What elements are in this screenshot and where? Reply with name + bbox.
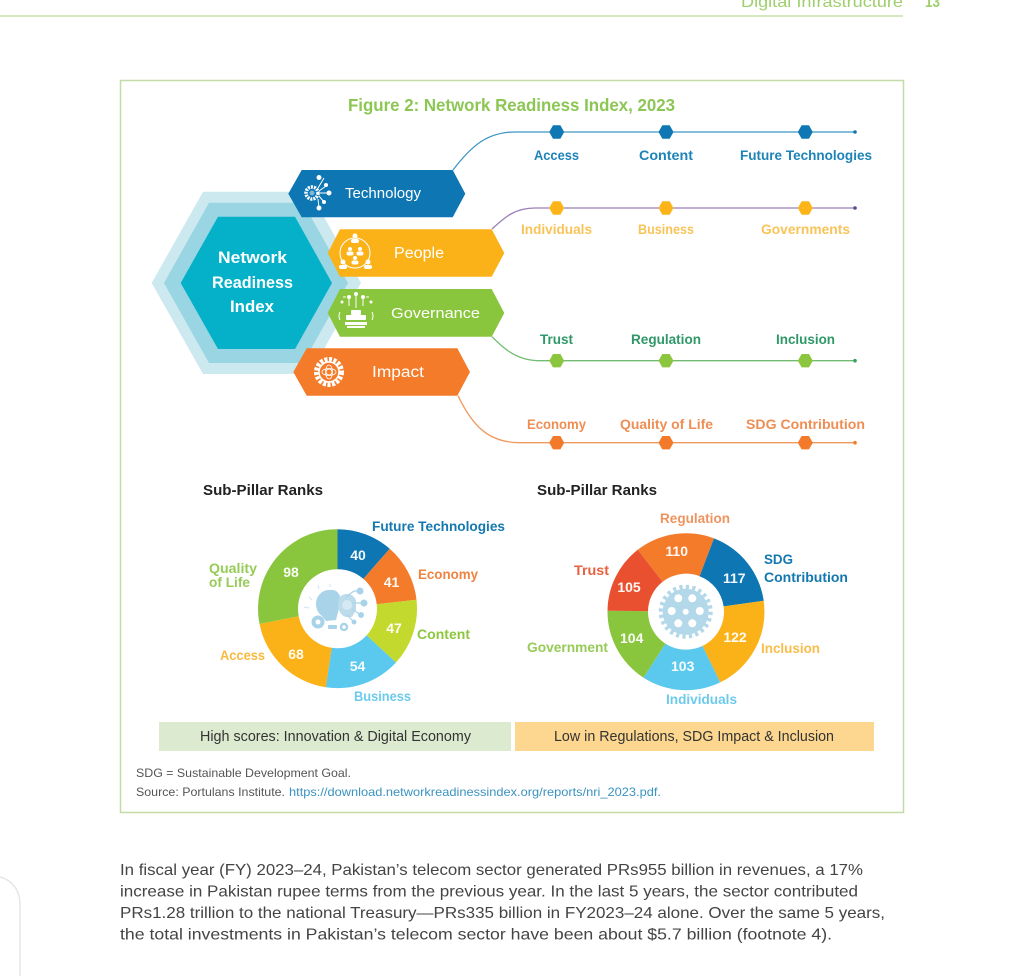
central hexagon: Network Readiness Index: Network <box>218 248 288 267</box>
donut labels: Future Technologies <box>372 518 505 534</box>
donut chart: left sub-pillar ranks <box>209 518 505 704</box>
donut labels <box>527 510 848 707</box>
icon: gear <box>661 587 710 636</box>
donut chart: right sub-pillar ranks: 110 <box>665 543 688 559</box>
donut chart: left sub-pillar ranks: 54 <box>350 658 365 674</box>
connector: Impact branch: Quality of Life <box>620 416 713 432</box>
notes and source: https://download.networkreadinessindex.org/reports/nri_2023.pdf. <box>289 785 661 799</box>
connector: People branch <box>492 201 857 237</box>
connector: Governance branch: Inclusion <box>776 331 835 347</box>
donut labels: Inclusion <box>761 640 820 656</box>
heading: sub-pillar ranks left: Sub-Pillar Ranks <box>203 483 323 499</box>
donut labels: Contribution <box>764 569 848 585</box>
donut labels: SDG <box>764 551 793 567</box>
icon: people network <box>339 234 372 269</box>
donut labels: Economy <box>418 566 478 582</box>
central hexagon: Network Readiness Index: Readiness <box>212 273 293 292</box>
page header <box>0 0 940 16</box>
donut labels: Regulation <box>660 510 730 526</box>
icon: AI heads with gears <box>304 584 368 630</box>
body paragraph: In fiscal year (FY) 2023–24, Pakistan’s telecom sector generated PRs955 billion in revenues, a 17% <box>120 862 863 879</box>
icon: technology gear <box>306 175 332 210</box>
banner: low scores <box>515 722 874 751</box>
body paragraph: the total investments in Pakistan’s telecom sector have been about $5.7 billion (footnote 4). <box>120 926 832 944</box>
connector: Governance branch: Regulation <box>631 331 701 347</box>
pillar: Impact: Impact <box>372 364 425 381</box>
donut chart: left sub-pillar ranks: 47 <box>386 620 402 636</box>
notes and source <box>136 766 661 799</box>
donut labels: of Life <box>209 574 250 590</box>
donut labels: Quality <box>209 560 257 576</box>
central hexagon: Network Readiness Index <box>152 192 361 374</box>
icon: impact gear <box>316 360 342 384</box>
banner: low scores: Low in Regulations, SDG Impact & Inclusion <box>554 729 834 745</box>
donut chart: right sub-pillar ranks: 117 <box>723 570 746 586</box>
overlay card edge at bottom left <box>0 877 20 976</box>
donut chart: left sub-pillar ranks: 98 <box>283 564 299 580</box>
connector: People branch: Governments <box>761 221 850 237</box>
pillar: People: People <box>394 245 444 262</box>
icon: governance desk <box>339 292 373 328</box>
donut labels: Access <box>220 647 265 663</box>
donut chart: left sub-pillar ranks: 40 <box>350 547 366 563</box>
connector: Governance branch <box>492 331 857 367</box>
donut labels: Government <box>527 639 608 655</box>
heading: sub-pillar ranks right: Sub-Pillar Ranks <box>537 483 657 499</box>
connector: People branch: Business <box>638 221 694 237</box>
pillar: Governance <box>328 289 504 337</box>
connector: Impact branch: Economy <box>527 416 586 432</box>
donut chart: left sub-pillar ranks: 41 <box>384 574 399 590</box>
title: Figure 2: Network Readiness Index, 2023 <box>348 95 675 115</box>
body paragraph <box>120 862 885 944</box>
donut chart: right sub-pillar ranks: 105 <box>617 579 641 595</box>
donut labels: Individuals <box>666 691 737 707</box>
pillar: Technology <box>288 170 465 217</box>
donut chart: right sub-pillar ranks: 103 <box>671 658 695 674</box>
notes and source: SDG = Sustainable Development Goal. <box>136 766 351 780</box>
connector: Technology branch: Content <box>639 147 693 163</box>
connector: Technology branch <box>453 125 872 170</box>
donut chart: right sub-pillar ranks: 122 <box>723 629 747 645</box>
connector: Impact branch: SDG Contribution <box>746 416 865 432</box>
connector: Governance branch: Trust <box>540 331 573 347</box>
donut labels: Trust <box>574 562 609 578</box>
donut labels <box>209 518 505 704</box>
pillar: Technology: Technology <box>345 185 421 202</box>
connector: Technology branch: Access <box>534 147 579 163</box>
connector: Impact branch <box>458 396 865 449</box>
body paragraph: increase in Pakistan rupee terms from the previous year. In the last 5 years, the sector contributed <box>120 884 858 900</box>
donut chart: left sub-pillar ranks: 68 <box>288 646 304 662</box>
connector: People branch: Individuals <box>521 221 592 237</box>
pillar: Impact <box>293 348 470 396</box>
donut chart: right sub-pillar ranks: 104 <box>620 630 644 646</box>
donut labels: Content <box>417 626 470 642</box>
donut chart: right sub-pillar ranks <box>527 510 848 707</box>
banner: high scores <box>159 722 511 751</box>
central hexagon: Network Readiness Index: Index <box>230 297 275 316</box>
connector: Technology branch: Future Technologies <box>740 147 872 163</box>
notes and source: Source: Portulans Institute. <box>136 785 285 799</box>
body paragraph: PRs1.28 trillion to the national Treasury—PRs335 billion in FY2023–24 alone. Over the same 5 years, <box>120 905 885 922</box>
pillar: People <box>328 229 504 277</box>
banner: high scores: High scores: Innovation & Digital Economy <box>200 729 472 745</box>
pillar: Governance: Governance <box>391 305 480 322</box>
panel: figure frame <box>120 80 904 812</box>
donut labels: Business <box>354 688 411 704</box>
